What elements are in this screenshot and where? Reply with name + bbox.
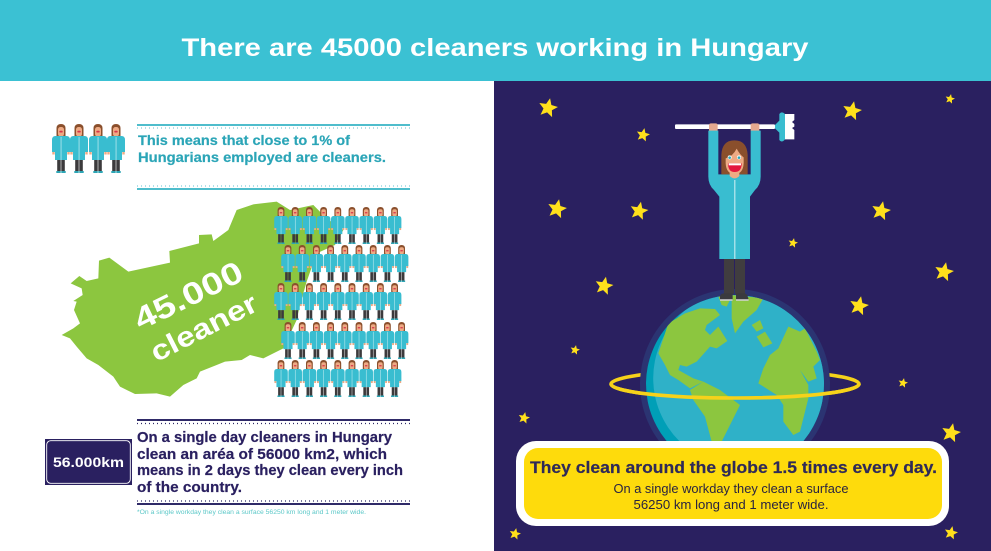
title: There are 45000 cleaners working in Hungary: [182, 34, 809, 62]
ring behind globe: [611, 370, 859, 398]
panel: globe: [494, 81, 991, 551]
panel: map and cleaner crowd: [62, 202, 408, 397]
header banner: [0, 0, 991, 81]
stars: [508, 93, 962, 540]
panel: employment share: [52, 124, 410, 189]
callout: globe fact: [516, 441, 949, 526]
callout heading: They clean around the globe 1.5 times every day.: [530, 459, 937, 477]
cleaner holding broom: [675, 112, 794, 301]
callout body: 56250 km long and 1 meter wide.: [634, 498, 828, 512]
text: area explanation: means in 2 days they clean every inch: [137, 462, 403, 479]
text: area explanation: [137, 429, 403, 496]
coat: [708, 131, 761, 259]
callout body: On a single workday they clean a surface: [614, 482, 849, 496]
map label: 45.000 cleaner: [128, 254, 263, 368]
globe: [640, 289, 830, 441]
map of Hungary: [62, 202, 343, 397]
badge: 56.000km: [45, 439, 132, 485]
text: area explanation: On a single day cleaners in Hungary: [137, 429, 393, 446]
text: area explanation: clean an aréa of 56000 km2, which: [137, 446, 387, 463]
badge: 56.000km: 56.000km: [53, 454, 124, 470]
text: close to 1 percent: [138, 132, 386, 165]
map label: 45.000 cleaner: cleaner: [145, 287, 263, 368]
broom: [675, 112, 794, 142]
callout body: [614, 482, 849, 512]
ring in front of globe: [611, 384, 859, 398]
footnote: *On a single workday they clean a surface 56250 km long and 1 meter wide.: [137, 509, 366, 516]
head: [721, 140, 748, 178]
text: close to 1 percent: This means that close to 1% of: [138, 132, 350, 148]
icon: four cleaners: [52, 124, 125, 173]
text: area explanation: of the country.: [137, 479, 242, 496]
crowd of cleaners: [274, 207, 408, 397]
map label: 45.000 cleaner: 45.000: [128, 254, 249, 337]
panel: area cleaned: [45, 420, 410, 516]
text: close to 1 percent: Hungarians employed are cleaners.: [138, 149, 386, 165]
legs and shoes: [720, 258, 749, 301]
